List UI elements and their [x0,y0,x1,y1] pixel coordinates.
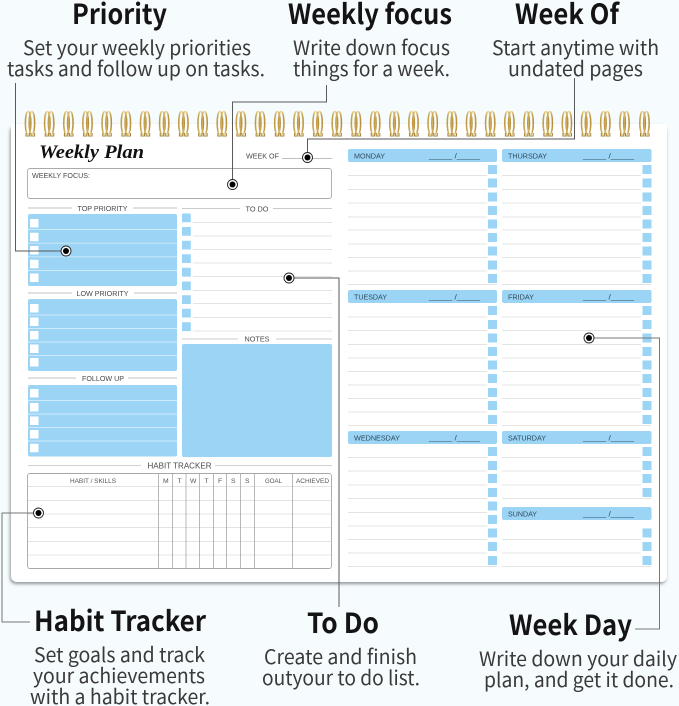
spiral binding rings [25,112,649,136]
panel: notes [182,334,332,457]
callout: habit tracker: Set goals and track [34,639,205,668]
weekly focus box: WEEKLY FOCUS: [32,171,90,180]
panel: monday: MONDAY [354,152,385,160]
callout: priority: Set your weekly priorities [23,32,251,61]
panel: saturday: _____ /_____ [582,434,635,442]
panel: thursday [502,149,652,284]
panel: friday: FRIDAY [508,292,534,302]
week of field: WEEK OF [246,152,279,160]
panel: habit tracker: S [231,478,236,485]
panel: friday [502,290,652,426]
callout leader lines and markers [2,78,660,629]
panel: follow up [28,374,177,456]
panel: to do [182,204,332,331]
week of field [246,152,332,160]
planner title: Weekly Plan [39,142,144,163]
panel: tuesday: _____ /_____ [428,292,481,302]
panel: saturday: SATURDAY [508,434,546,442]
callout: priority [7,0,265,82]
panel: habit tracker: ACHIEVED [296,478,329,485]
callout: week day: plan, and get it done. [484,664,674,693]
panel: sunday: _____ /_____ [582,510,635,518]
panel: top priority [28,204,177,286]
panel: habit tracker: HABIT TRACKER [148,460,212,470]
panel: thursday: THURSDAY [508,152,547,160]
panel: habit tracker: W [190,478,197,485]
callout: to do: outyour to do list. [262,662,420,691]
panel: wednesday: _____ /_____ [428,434,481,442]
panel: habit tracker: T [178,478,182,485]
callout: habit tracker [30,600,210,706]
panel: sunday [502,507,652,566]
panel: thursday: _____ /_____ [582,152,635,160]
panel: monday: _____ /_____ [428,152,481,160]
panel: low priority: LOW PRIORITY [76,289,129,298]
callout: to do [262,602,420,691]
callout: habit tracker: your achievements [33,660,205,689]
panel: habit tracker [28,460,332,568]
panel: monday [348,149,497,284]
panel: saturday [502,431,652,498]
panel: top priority: TOP PRIORITY [78,204,128,213]
callout: weekly focus [288,0,452,82]
callout: to do: Create and finish [264,641,417,670]
callout: weekly focus: things for a week. [293,53,450,82]
panel: sunday: SUNDAY [508,510,537,518]
weekly focus box [28,168,332,198]
panel: wednesday: WEDNESDAY [354,434,400,442]
callout: habit tracker: Habit Tracker [34,600,207,640]
callout: week day [479,604,678,693]
callout: week of: undated pages [508,53,643,82]
panel: tuesday: TUESDAY [354,292,387,302]
panel: friday: _____ /_____ [582,292,635,302]
panel: habit tracker: M [163,478,169,485]
callout: weekly focus: Write down focus [293,32,450,61]
callout: week day: Write down your daily [479,643,678,672]
notebook page [11,112,667,582]
panel: wednesday [348,431,497,566]
callout: to do: To Do [307,602,379,642]
panel: low priority [28,289,177,371]
callout: priority: tasks and follow up on tasks. [7,53,265,82]
callout: week day: Week Day [509,604,632,644]
panel: to do: TO DO [246,204,269,214]
callout: week of [492,0,659,82]
panel: habit tracker: T [204,478,209,485]
panel: follow up: FOLLOW UP [82,374,124,383]
panel: habit tracker: GOAL [265,478,282,485]
panel: habit tracker: S [245,478,250,485]
panel: habit tracker: HABIT / SKILLS [70,478,116,485]
panel: habit tracker: F [218,478,222,485]
panel: notes: NOTES [244,334,270,344]
panel: tuesday [348,290,497,426]
callout: week of: Start anytime with [492,32,659,61]
